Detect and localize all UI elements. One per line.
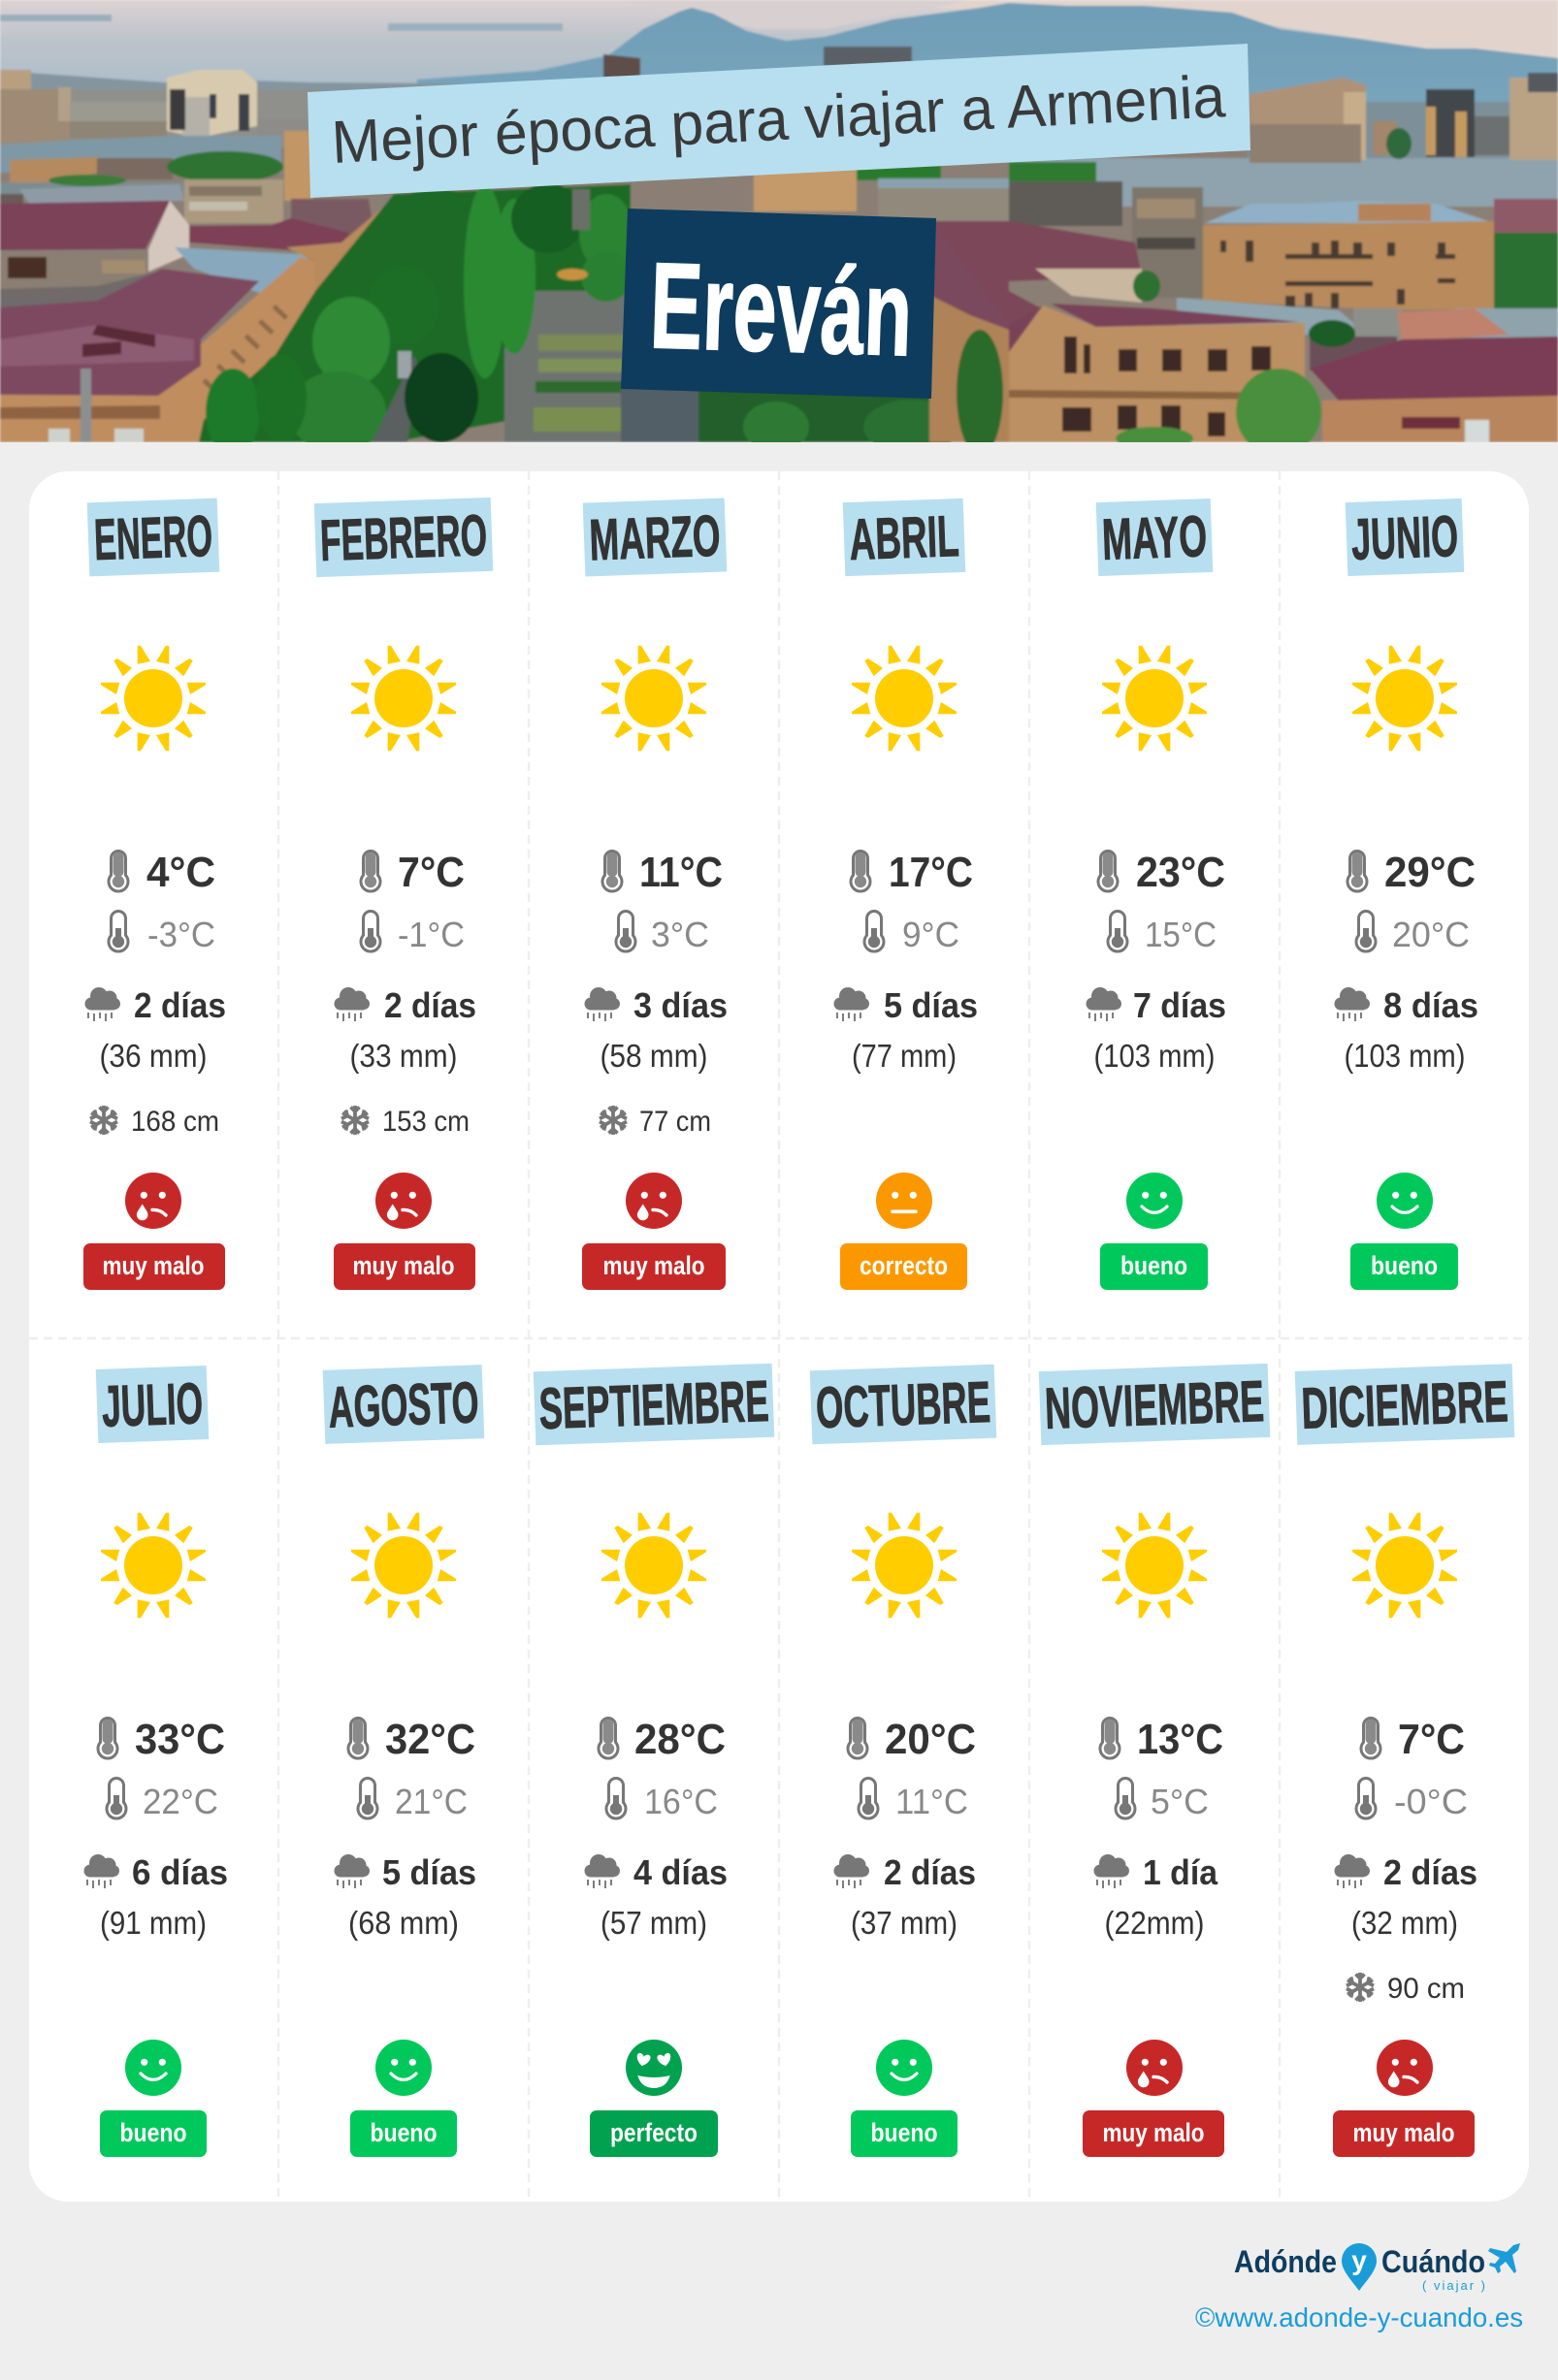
icon: sun (101, 646, 206, 751)
max temperature (1347, 849, 1476, 896)
rating (100, 2040, 207, 2157)
icon: sun (101, 1513, 206, 1618)
month label: FEBRERO (319, 502, 488, 573)
rainy days: 5 días (884, 985, 978, 1025)
rating (1350, 1173, 1458, 1290)
rainfall: (58 mm) (600, 1038, 708, 1074)
min temperature: 9°C (902, 915, 959, 954)
right skyline (1250, 77, 1368, 125)
rating (582, 1173, 726, 1290)
website credit: ©www.adonde-y-cuando.es (1195, 2302, 1523, 2332)
rating (1083, 2040, 1224, 2157)
rating (851, 2040, 958, 2157)
panel: junio (1335, 499, 1478, 1290)
icon: sun (852, 1513, 957, 1618)
rainy days (1335, 985, 1478, 1025)
rating: muy malo (353, 1251, 454, 1280)
min temperature: 5°C (1151, 1782, 1209, 1821)
city banner: Ereván (648, 237, 914, 381)
max temperature (1100, 1716, 1223, 1763)
rating: perfecto (610, 2118, 698, 2147)
rainy days (83, 1852, 228, 1892)
max temperature (851, 849, 973, 896)
row: julio to diciembre (83, 1364, 1514, 2157)
rainfall: (32 mm) (1351, 1905, 1458, 1941)
city banner (621, 209, 936, 399)
rating: bueno (1371, 1251, 1438, 1280)
min temperature (109, 912, 215, 954)
title banner: Mejor época para viajar a Armenia (330, 63, 1227, 177)
rainfall: (37 mm) (851, 1905, 958, 1941)
month label: SEPTIEMBRE (537, 1368, 770, 1441)
max temperature: 28°C (634, 1716, 726, 1763)
max temperature: 13°C (1137, 1716, 1223, 1763)
panel: julio (83, 1366, 228, 2157)
max temperature: 23°C (1136, 849, 1225, 896)
month label: MARZO (588, 503, 722, 572)
min temperature (358, 1779, 468, 1821)
max temperature (1361, 1716, 1465, 1763)
rainy days (584, 985, 728, 1025)
min temperature (361, 912, 465, 954)
month label: OCTUBRE (815, 1369, 991, 1440)
icon: plane (1488, 2243, 1520, 2273)
month label: ENERO (93, 503, 213, 572)
rating (83, 1173, 225, 1290)
rating (1100, 1173, 1208, 1290)
month label: NOVIEMBRE (1044, 1368, 1265, 1441)
min temperature: 20°C (1392, 915, 1470, 954)
logo: Adónde y Cuándo viajar (1234, 2243, 1520, 2293)
rainfall: (103 mm) (1345, 1038, 1465, 1074)
max temperature: 7°C (398, 849, 465, 896)
min temperature (1116, 1779, 1209, 1821)
month label: JUNIO (1350, 503, 1459, 572)
rainy days: 5 días (382, 1852, 476, 1892)
rainfall: (68 mm) (348, 1905, 459, 1941)
max temperature: 17°C (889, 849, 973, 896)
max temperature: 32°C (385, 1716, 475, 1763)
month label: MAYO (1101, 503, 1208, 572)
rainy days (334, 985, 476, 1025)
month label (314, 498, 493, 577)
rating: bueno (120, 2118, 186, 2147)
month label (87, 499, 219, 576)
month label (323, 1365, 484, 1444)
rainy days: 7 días (1133, 985, 1226, 1025)
max temperature (98, 1716, 225, 1763)
rainy days: 1 día (1143, 1852, 1218, 1892)
min temperature (864, 912, 959, 954)
min temperature: 3°C (651, 915, 709, 954)
max temperature (348, 1716, 475, 1763)
icon: sun (1102, 1513, 1207, 1618)
min temperature: 15°C (1145, 915, 1217, 954)
snowfall: 90 cm (1387, 1973, 1465, 2005)
panel: abril (834, 499, 978, 1290)
rating (334, 1173, 475, 1290)
min temperature (1108, 912, 1217, 954)
max temperature (1098, 849, 1225, 896)
min temperature: -1°C (398, 915, 465, 954)
panel: enero (83, 499, 226, 1290)
max temperature (602, 849, 723, 896)
panel: octubre (810, 1365, 996, 2157)
min temperature (859, 1779, 968, 1821)
rainfall: (36 mm) (99, 1038, 208, 1074)
rating: muy malo (1352, 2118, 1455, 2147)
rainy days: 2 días (134, 985, 226, 1025)
rating (1333, 2040, 1475, 2157)
icon: map pin (1342, 2243, 1377, 2291)
panel: marzo (582, 498, 728, 1290)
max temperature: 11°C (639, 849, 723, 896)
logo: Adónde y Cuándo viajar: Adónde (1234, 2244, 1337, 2279)
icon: sun (351, 1513, 456, 1618)
snowfall: 168 cm (131, 1106, 219, 1138)
rating: muy malo (103, 1251, 204, 1280)
rating: muy malo (1102, 2118, 1205, 2147)
icon: sun (852, 646, 957, 751)
min temperature: 16°C (644, 1782, 718, 1821)
left skyline (0, 69, 32, 91)
rainfall: (22mm) (1104, 1905, 1205, 1941)
month label: ABRIL (848, 503, 960, 572)
min temperature: 22°C (143, 1782, 218, 1821)
month label (843, 499, 965, 576)
panel: agosto (323, 1365, 484, 2157)
panel: mayo (1087, 499, 1226, 1290)
month label: JULIO (101, 1370, 204, 1439)
icon: sun (601, 1513, 706, 1618)
rating: bueno (371, 2118, 437, 2147)
rainy days: 4 días (633, 1852, 728, 1892)
month label (1346, 499, 1464, 576)
snowfall: 153 cm (382, 1106, 470, 1138)
rainfall: (91 mm) (100, 1905, 207, 1941)
icon: sun (1352, 1513, 1457, 1618)
snowfall: 77 cm (639, 1106, 711, 1138)
rainfall: (33 mm) (349, 1038, 458, 1074)
icon: sun (1102, 646, 1207, 751)
rainy days (834, 1852, 976, 1892)
snowfall (1347, 1973, 1465, 2005)
rainy days (834, 985, 978, 1025)
rating (840, 1173, 967, 1290)
min temperature (1356, 912, 1470, 954)
icon: sun (1352, 646, 1457, 751)
panel: noviembre (1039, 1364, 1270, 2157)
min temperature (616, 912, 709, 954)
trees and central avenue (199, 184, 631, 442)
rainy days (1094, 1852, 1218, 1892)
logo: Adónde y Cuándo viajar: ( viajar ) (1422, 2278, 1485, 2293)
rainy days (584, 1852, 728, 1892)
min temperature: -0°C (1394, 1782, 1468, 1821)
max temperature: 4°C (146, 849, 215, 896)
max temperature: 33°C (135, 1716, 225, 1763)
rainy days: 2 días (384, 985, 476, 1025)
photo: Yerevan skyline with Mount Ararat (0, 0, 1558, 456)
min temperature: -3°C (147, 915, 215, 954)
rating: bueno (871, 2118, 937, 2147)
panel: white card (29, 471, 1529, 2202)
snowfall (90, 1106, 219, 1138)
snowfall (600, 1106, 711, 1138)
rating (350, 2040, 457, 2157)
rainy days: 2 días (884, 1852, 976, 1892)
panel: febrero (314, 498, 493, 1290)
max temperature (361, 849, 465, 896)
rating: bueno (1120, 1251, 1187, 1280)
left roofs and facades (0, 193, 24, 206)
rating: correcto (860, 1251, 948, 1280)
min temperature: 21°C (395, 1782, 468, 1821)
rainy days (85, 985, 226, 1025)
rainy days: 3 días (633, 985, 728, 1025)
rainfall: (103 mm) (1094, 1038, 1215, 1074)
rating (590, 2040, 718, 2157)
rainfall: (77 mm) (852, 1038, 957, 1074)
month label (810, 1365, 996, 1444)
min temperature: 11°C (895, 1782, 968, 1821)
month label (534, 1364, 774, 1445)
min temperature (1356, 1779, 1468, 1821)
rainy days: 8 días (1383, 985, 1478, 1025)
rainfall: (57 mm) (600, 1905, 707, 1941)
rainy days (1087, 985, 1226, 1025)
max temperature (109, 849, 215, 896)
icon: sun (351, 646, 456, 751)
right-of-centre roofs (929, 291, 1014, 442)
rainy days (1335, 1852, 1477, 1892)
month label (1096, 499, 1213, 576)
max temperature: 29°C (1384, 849, 1476, 896)
snowfall (341, 1106, 470, 1138)
min temperature (107, 1779, 218, 1821)
icon: sun (601, 646, 706, 751)
rainy days: 6 días (132, 1852, 228, 1892)
rainy days: 2 días (1383, 1852, 1477, 1892)
min temperature (606, 1779, 718, 1821)
icon: map pin: y (1351, 2245, 1367, 2275)
rating: muy malo (603, 1251, 704, 1280)
max temperature: 7°C (1398, 1716, 1465, 1763)
month label (583, 498, 727, 577)
rainy days (334, 1852, 476, 1892)
month label: AGOSTO (327, 1369, 480, 1440)
max temperature (848, 1716, 976, 1763)
max temperature (599, 1716, 726, 1763)
month label (1039, 1364, 1270, 1445)
logo: Adónde y Cuándo viajar: Cuándo (1381, 2244, 1485, 2279)
panel: septiembre (534, 1364, 774, 2157)
month label (96, 1366, 209, 1443)
max temperature: 20°C (885, 1716, 976, 1763)
panel: diciembre (1295, 1364, 1514, 2157)
